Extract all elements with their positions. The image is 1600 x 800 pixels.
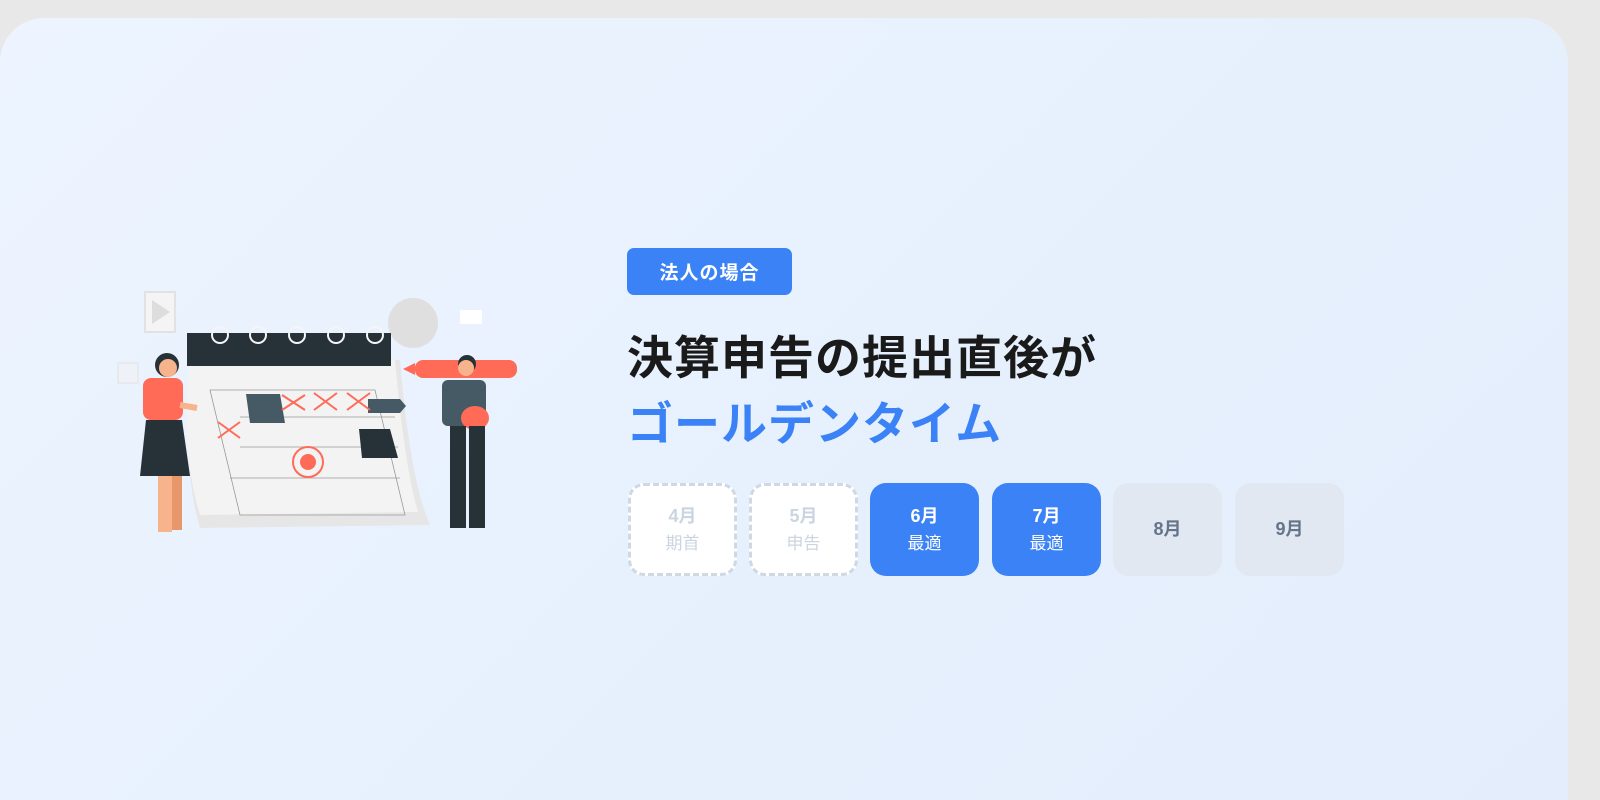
title line 2: ゴールデンタイム: [627, 398, 1002, 450]
illustration: calendar with two people: [118, 291, 517, 532]
month: April: 4月: [668, 506, 696, 526]
month: August: [1113, 483, 1222, 576]
month: May: [749, 483, 858, 576]
month: July: [992, 483, 1101, 576]
title line 1: 決算申告の提出直後が: [627, 332, 1097, 384]
month: June: [870, 483, 979, 576]
month: August: 8月: [1153, 519, 1182, 539]
calendar: [187, 327, 430, 528]
month: April: 期首: [666, 534, 700, 552]
month: June: 6月: [910, 506, 938, 526]
month: September: [1235, 483, 1344, 576]
person left: [140, 353, 197, 532]
month: July: 7月: [1032, 506, 1060, 526]
badge: [627, 248, 792, 295]
decorative frames: [118, 292, 482, 383]
month: July: 最適: [1030, 534, 1064, 552]
month: September: 9月: [1275, 519, 1304, 539]
month: June: 最適: [908, 534, 942, 552]
month: April: [628, 483, 737, 576]
badge: 法人の場合: [659, 263, 760, 284]
person right: [403, 355, 517, 528]
month: May: 申告: [786, 534, 820, 552]
month: May: 5月: [789, 506, 818, 526]
